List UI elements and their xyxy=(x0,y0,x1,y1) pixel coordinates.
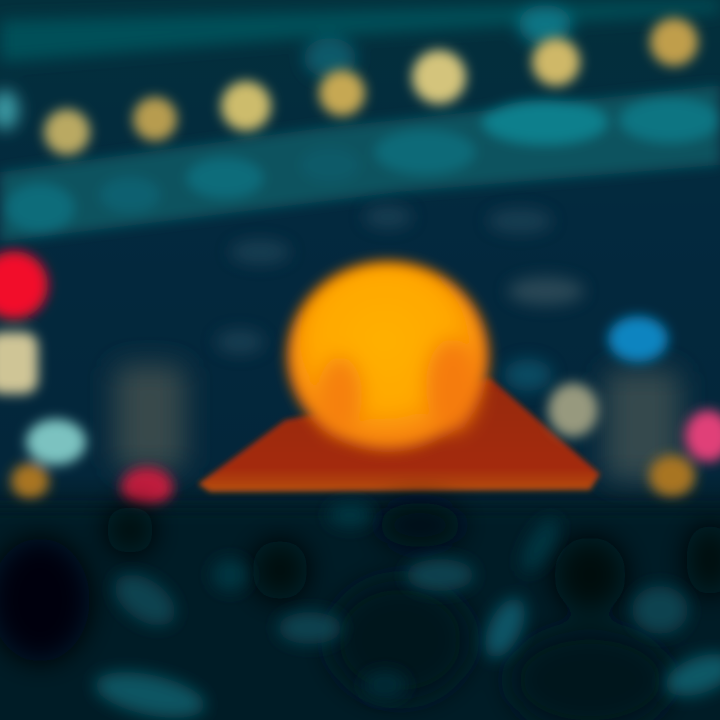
mountain xyxy=(198,378,600,492)
right side lights xyxy=(548,316,720,497)
cream light xyxy=(0,332,38,394)
red heart light xyxy=(0,251,48,319)
blue light xyxy=(608,316,668,362)
string lights xyxy=(44,18,698,155)
crowd silhouette xyxy=(0,503,720,720)
teal banner xyxy=(0,85,720,242)
top teal haze xyxy=(0,0,720,130)
crimson light xyxy=(121,467,173,507)
sun xyxy=(286,260,490,452)
faint background shapes xyxy=(216,206,584,391)
amber light xyxy=(11,463,49,499)
speaker stack left xyxy=(115,365,185,470)
cream light xyxy=(548,383,598,437)
pale teal light xyxy=(26,419,86,465)
left side lights xyxy=(0,251,173,507)
speaker stack right xyxy=(605,370,680,480)
pink light xyxy=(685,410,720,462)
amber light xyxy=(649,455,695,497)
